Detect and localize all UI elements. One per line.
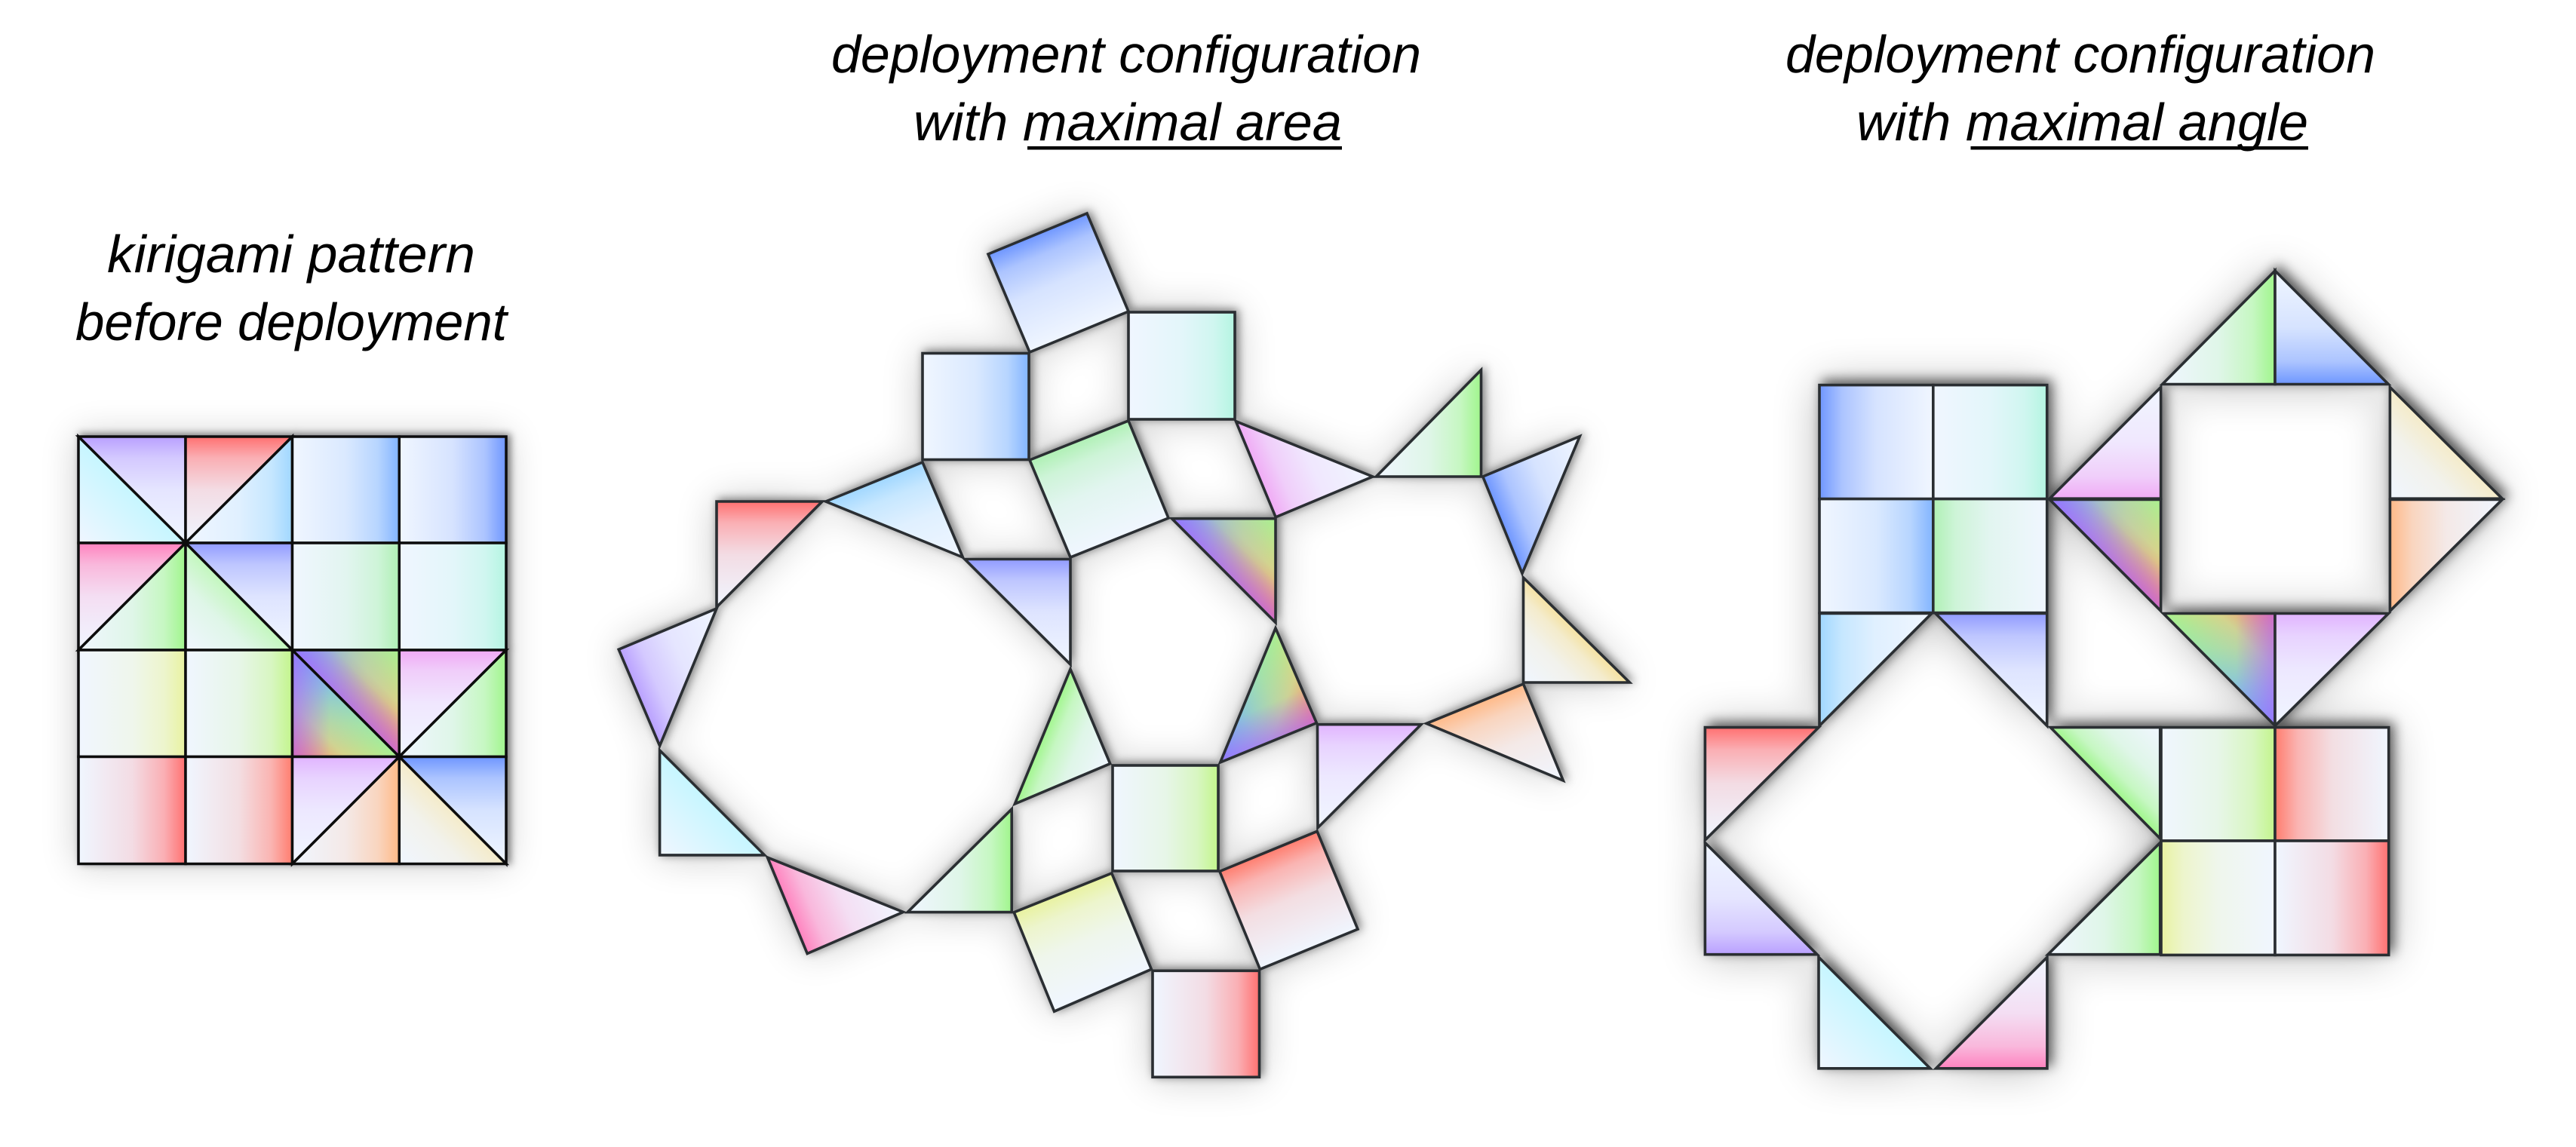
tile: red triangle [717,501,822,607]
tile: green middle triangle [1015,669,1110,804]
tile: tilted red square [1220,831,1358,969]
tile: red triangle [1705,728,1819,840]
title: deployment configuration with maximal angle: with maximal angle [1856,93,2308,152]
tile: cyan triangle [660,750,765,855]
tile: deep blue square [1819,385,1933,499]
tile: yellow square [78,650,186,757]
tile: orange triangle [1426,684,1563,781]
tile: magenta triangle [1236,422,1373,517]
tile: green lower triangle [2048,843,2160,955]
tile: yellow square [2161,841,2275,955]
tile: rainbow upper triangle [293,650,399,757]
tile: rainbow bottom triangle [2163,614,2275,725]
tile: blue square [1819,499,1933,613]
tile: deep blue top triangle [2275,271,2388,385]
tile: cyan triangle [1819,957,1930,1069]
tile: tilted yellow square [1014,873,1151,1011]
tile: deep blue triangle [1483,437,1580,573]
tile: blue purple triangle [965,560,1070,664]
tile: green lower triangle [907,809,1012,912]
tile: green top triangle [2163,271,2275,385]
tile: purple triangle [78,437,186,543]
tile: blue square [923,353,1029,460]
tile: green right triangle [399,650,506,757]
tile: red square [78,757,186,864]
tile: pink triangle [768,857,903,953]
tile: rainbow lower triangle [1220,628,1316,762]
tile: blue square [293,437,399,543]
tile: tilted deep blue square [988,213,1128,352]
tile: sky triangle [826,462,963,557]
panel: kirigami pattern before deployment [78,437,506,864]
tile: green triangle [78,543,186,650]
tile: green hypotenuse triangle [186,543,293,650]
panel: deployment configuration with maximal angle [1705,271,2502,1069]
panel: deployment configuration with maximal area [619,213,1629,1077]
title: kirigami pattern before deployment: kirigami pattern [107,225,475,284]
tile: purple triangle [1705,843,1817,955]
tile: gold triangle [399,757,506,864]
tile: yellow green square [2161,728,2275,841]
tile: pink triangle [1936,957,2047,1069]
tile: red square [1153,971,1260,1077]
tile: sky triangle [1819,614,1932,725]
title: deployment configuration with maximal area: deployment configuration [831,25,1421,84]
tile: mint square [293,543,399,650]
tile: pink triangle [78,543,186,650]
tile: red square [2275,841,2389,955]
tile: lavender triangle [1317,725,1421,828]
tile: blue purple triangle [1936,614,2047,725]
tile: rainbow upper triangle [1172,519,1276,623]
tile: teal square [1128,312,1235,419]
tile: lavender triangle [2275,614,2388,725]
title: deployment configuration with maximal area: with maximal area [913,93,1342,152]
tile: magenta triangle [2049,388,2161,498]
tile: orange triangle [2390,499,2502,611]
tile: orange triangle [293,757,399,864]
tile: deep blue triangle [399,757,506,864]
tile: gold triangle [1524,578,1629,682]
title: deployment configuration with maximal angle [1785,25,2375,152]
tile: lavender triangle [293,757,399,864]
tile: purple triangle [619,609,717,746]
tile: mint square [1933,499,2047,613]
tile: green upper triangle [2050,728,2160,839]
tile: teal square [1933,385,2047,499]
tile: sky triangle [186,437,293,543]
tile: teal square [399,543,506,650]
tile: blue purple triangle [186,543,293,650]
tile: green top triangle [1376,370,1481,477]
tile: yellow green square [186,650,293,757]
tile: red triangle [186,437,293,543]
tile: cyan triangle [78,437,186,543]
title: kirigami pattern before deployment: before deployment [75,293,509,351]
tile: tilted mint square [1030,421,1168,557]
tile: salmon square [2275,728,2389,841]
tile: deep blue square [399,437,506,543]
tile: rainbow left triangle [2049,499,2161,611]
tile: gold triangle [2390,388,2502,498]
tile: yellow green square [1113,765,1218,871]
tile: salmon square [186,757,293,864]
title: deployment configuration with maximal angle: deployment configuration [1785,25,2375,84]
tile: rainbow lower triangle [293,650,399,757]
tile: magenta triangle [399,650,506,757]
title: deployment configuration with maximal area [831,25,1421,152]
title: kirigami pattern before deployment [75,225,509,351]
